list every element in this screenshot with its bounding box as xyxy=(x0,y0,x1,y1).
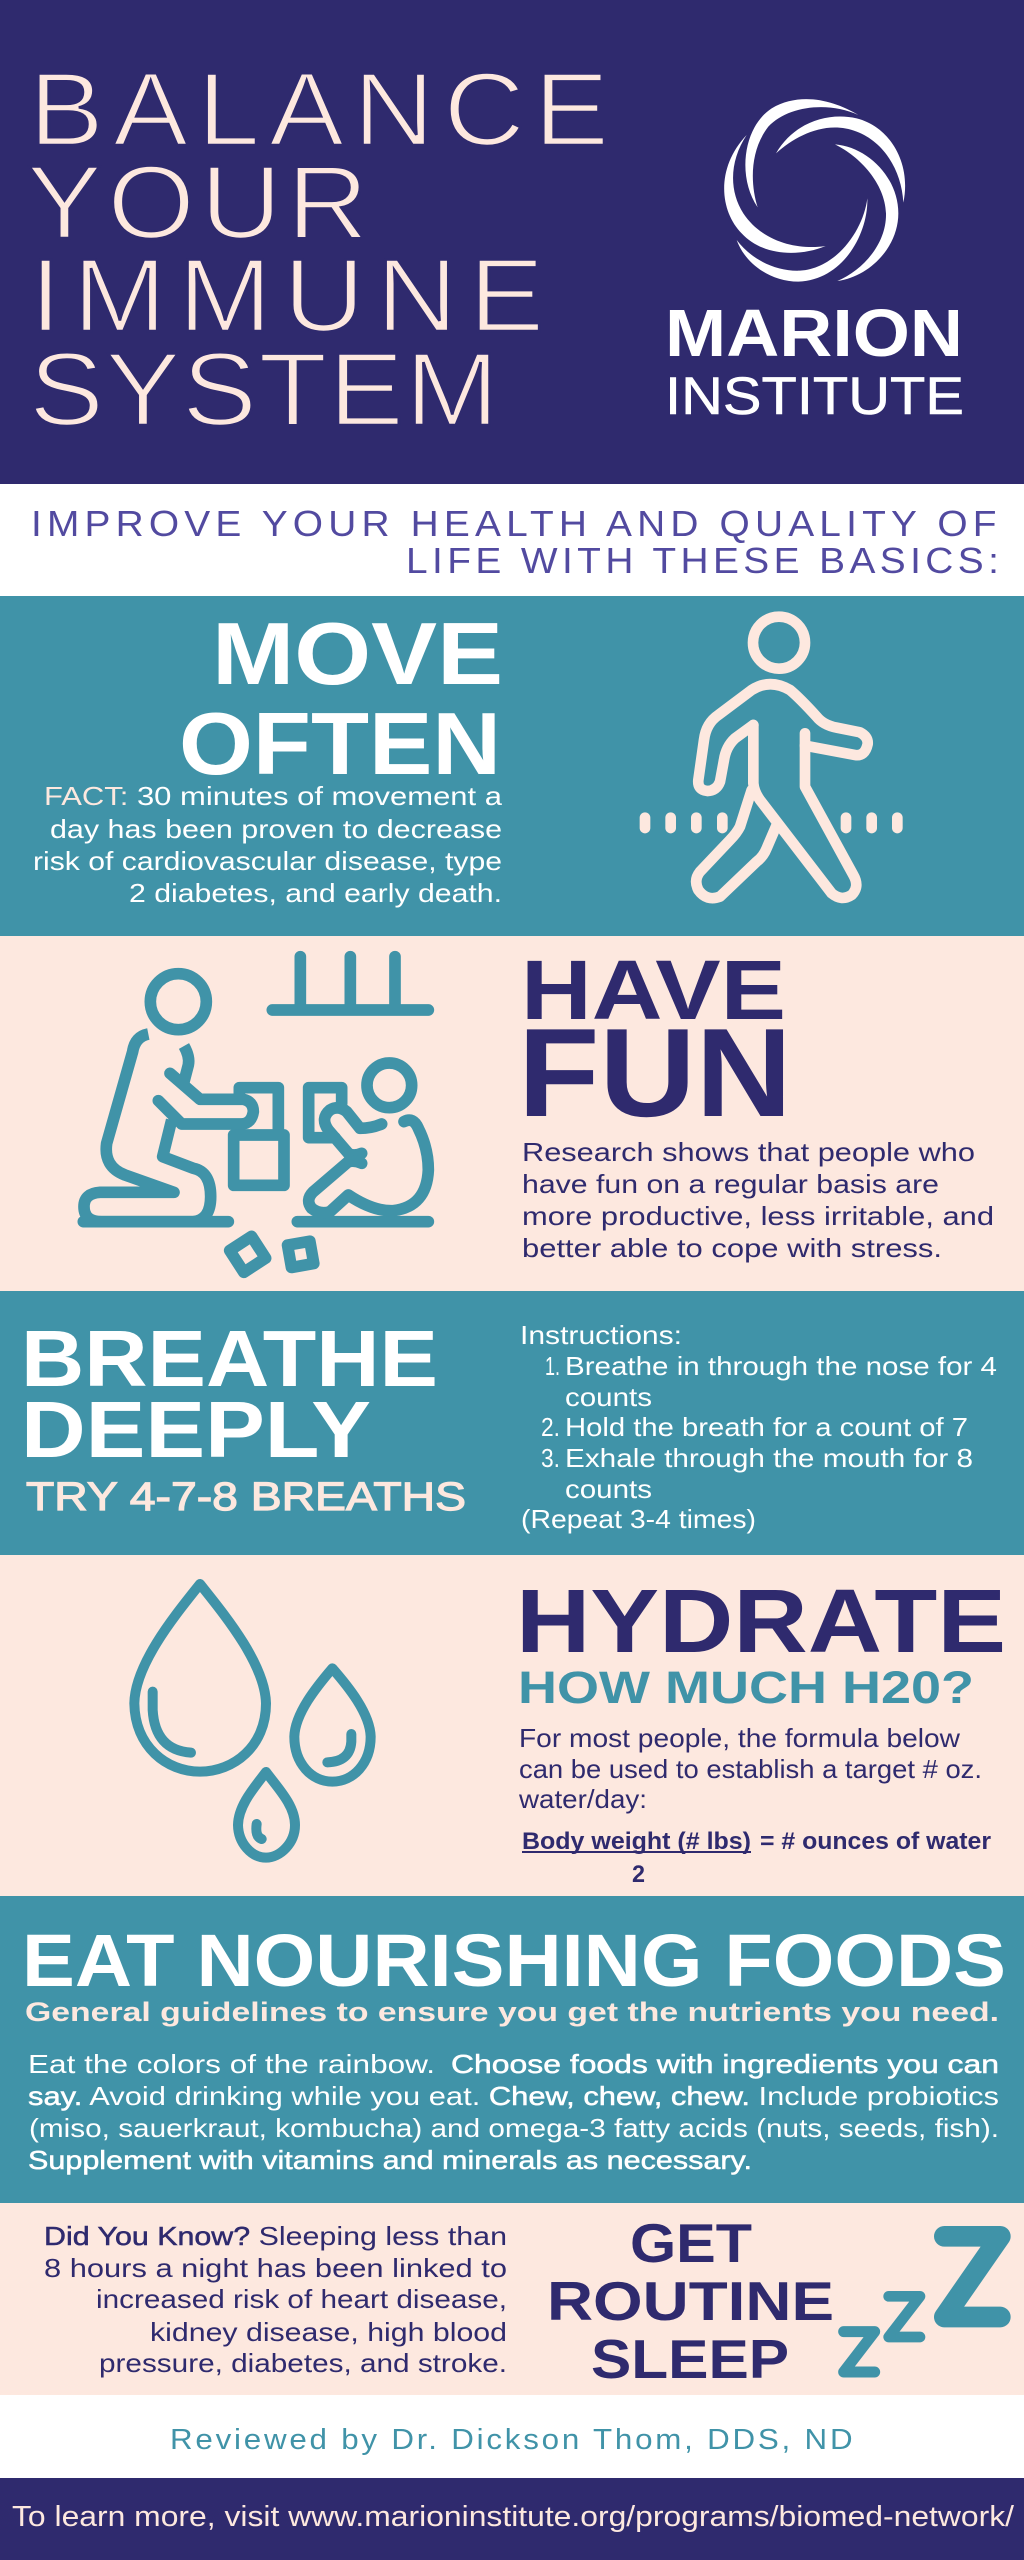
icon: swirl mark xyxy=(724,99,905,282)
heading: move often xyxy=(179,604,503,793)
text: breathing instructions: counts xyxy=(565,1382,652,1412)
heading: get routine sleep: SLEEP xyxy=(591,2328,789,2390)
subtitle xyxy=(31,503,999,581)
text: hydration intro: water/day: xyxy=(518,1784,647,1814)
heading: eat nourishing foods: EAT NOURISHING FOODS xyxy=(22,1919,1006,2002)
panel: eat nourishing foods xyxy=(0,1896,1024,2203)
text: hydration intro: can be used to establish a target # oz. xyxy=(519,1754,982,1784)
title: SYSTEM xyxy=(29,331,499,447)
text: movement fact: FACT: 30 minutes of movement a xyxy=(44,781,503,811)
formula: body weight over 2: = # ounces of water xyxy=(760,1828,991,1855)
text: hydration intro xyxy=(518,1723,982,1814)
heading: get routine sleep: GET xyxy=(630,2212,752,2274)
text: food guidelines: Eat the colors of the rainbow. xyxy=(28,2049,435,2079)
heading: breathe deeply xyxy=(21,1314,438,1474)
panel: header xyxy=(0,0,1024,484)
credit: reviewed by: Reviewed by Dr. Dickson Thom, DDS, ND xyxy=(170,2424,853,2456)
text: fun research xyxy=(522,1137,994,1263)
text: movement fact xyxy=(33,781,503,908)
panel: get routine sleep xyxy=(0,2203,1024,2395)
text: breathing instructions: (Repeat 3-4 times) xyxy=(521,1504,756,1534)
heading: breathe deeply: BREATHE xyxy=(21,1314,438,1403)
text: food guidelines xyxy=(28,2049,999,2175)
text: food guidelines: Supplement with vitamins and minerals as necessary. xyxy=(28,2145,752,2175)
icon: sleeping zzz xyxy=(844,2236,1000,2372)
text: breathing instructions: 2. xyxy=(541,1412,560,1442)
text: food guidelines: Choose foods with ingredients you can xyxy=(451,2049,999,2079)
formula: body weight over 2: 2 xyxy=(632,1861,645,1888)
text: breathing instructions: Exhale through the mouth for 8 xyxy=(565,1443,973,1473)
title: BALANCE xyxy=(29,51,609,167)
panel: have fun xyxy=(0,936,1024,1291)
logo wordmark: MARION xyxy=(665,296,963,371)
text: hydration intro: For most people, the formula below xyxy=(519,1723,960,1753)
text: breathing instructions: Hold the breath for a count of 7 xyxy=(565,1412,968,1442)
panel: move often xyxy=(0,596,1024,936)
heading: have fun xyxy=(518,943,792,1143)
formula: body weight over 2 xyxy=(522,1828,991,1888)
text: breathing instructions: 1. xyxy=(545,1351,560,1381)
panel: hydrate xyxy=(0,1555,1024,1896)
text: breathing instructions: 3. xyxy=(541,1443,560,1473)
title xyxy=(27,51,609,447)
text: breathing instructions xyxy=(520,1320,997,1534)
text: did you know sleep fact: kidney disease, high blood xyxy=(150,2317,507,2347)
panel: breathe deeply xyxy=(0,1291,1024,1555)
icon: walking person xyxy=(645,617,897,898)
text: fun research: more productive, less irritable, and xyxy=(522,1201,994,1231)
logo: Marion Institute xyxy=(665,99,964,426)
text: did you know sleep fact: 8 hours a night has been linked to xyxy=(44,2253,507,2283)
text: did you know sleep fact: pressure, diabetes, and stroke. xyxy=(99,2348,507,2378)
text: breathing instructions: Breathe in through the nose for 4 xyxy=(565,1351,997,1381)
text: fun research: have fun on a regular basis are xyxy=(522,1169,939,1199)
heading: get routine sleep: ROUTINE xyxy=(547,2270,834,2332)
formula: body weight over 2: Body weight (# lbs) xyxy=(522,1828,751,1855)
text: did you know sleep fact: increased risk of heart disease, xyxy=(96,2284,507,2314)
icon: water drops xyxy=(134,1584,371,1858)
title: YOUR xyxy=(27,144,368,260)
logo wordmark: INSTITUTE xyxy=(665,367,964,426)
subheading: how much h20: HOW MUCH H20? xyxy=(518,1662,974,1713)
text: breathing instructions: Instructions: xyxy=(520,1320,682,1350)
text: food guidelines: say. Avoid drinking while you eat. Chew, chew, chew. Include probiotics xyxy=(28,2081,999,2111)
heading: get routine sleep xyxy=(547,2212,834,2390)
text: fun research: Research shows that people who xyxy=(522,1137,975,1167)
heading: have fun: FUN xyxy=(518,1002,792,1143)
text: breathing instructions: counts xyxy=(565,1474,652,1504)
text: movement fact: day has been proven to decrease xyxy=(50,814,502,844)
icon: adult and child playing with blocks xyxy=(83,957,428,1272)
heading: have fun: HAVE xyxy=(521,943,786,1037)
text: food guidelines: (miso, sauerkraut, kombucha) and omega-3 fatty acids (nuts, seeds, fish). xyxy=(29,2113,999,2143)
text: movement fact: risk of cardiovascular disease, type xyxy=(33,846,502,876)
heading: hydrate: HYDRATE xyxy=(516,1572,1006,1672)
heading: move often: OFTEN xyxy=(179,694,501,793)
heading: breathe deeply: DEEPLY xyxy=(21,1385,371,1474)
subtitle: IMPROVE YOUR HEALTH AND QUALITY OF xyxy=(31,503,997,544)
subheading: general guidelines: General guidelines to ensure you get the nutrients you need. xyxy=(25,1997,999,2027)
panel: footer xyxy=(0,2478,1024,2560)
text: did you know sleep fact: Did You Know? Sleeping less than xyxy=(44,2221,507,2251)
subheading: 4-7-8 breaths: TRY 4-7-8 BREATHS xyxy=(26,1475,466,1519)
text: did you know sleep fact xyxy=(44,2221,507,2378)
footer link text: To learn more, visit www.marioninstitute.org/programs/biomed-network/ xyxy=(12,2501,1015,2533)
logo wordmark xyxy=(665,296,964,426)
title: IMMUNE xyxy=(30,237,544,353)
text: fun research: better able to cope with stress. xyxy=(522,1233,942,1263)
subtitle: LIFE WITH THESE BASICS: xyxy=(406,540,999,581)
heading: move often: MOVE xyxy=(212,604,503,703)
text: movement fact: 2 diabetes, and early death. xyxy=(129,878,502,908)
